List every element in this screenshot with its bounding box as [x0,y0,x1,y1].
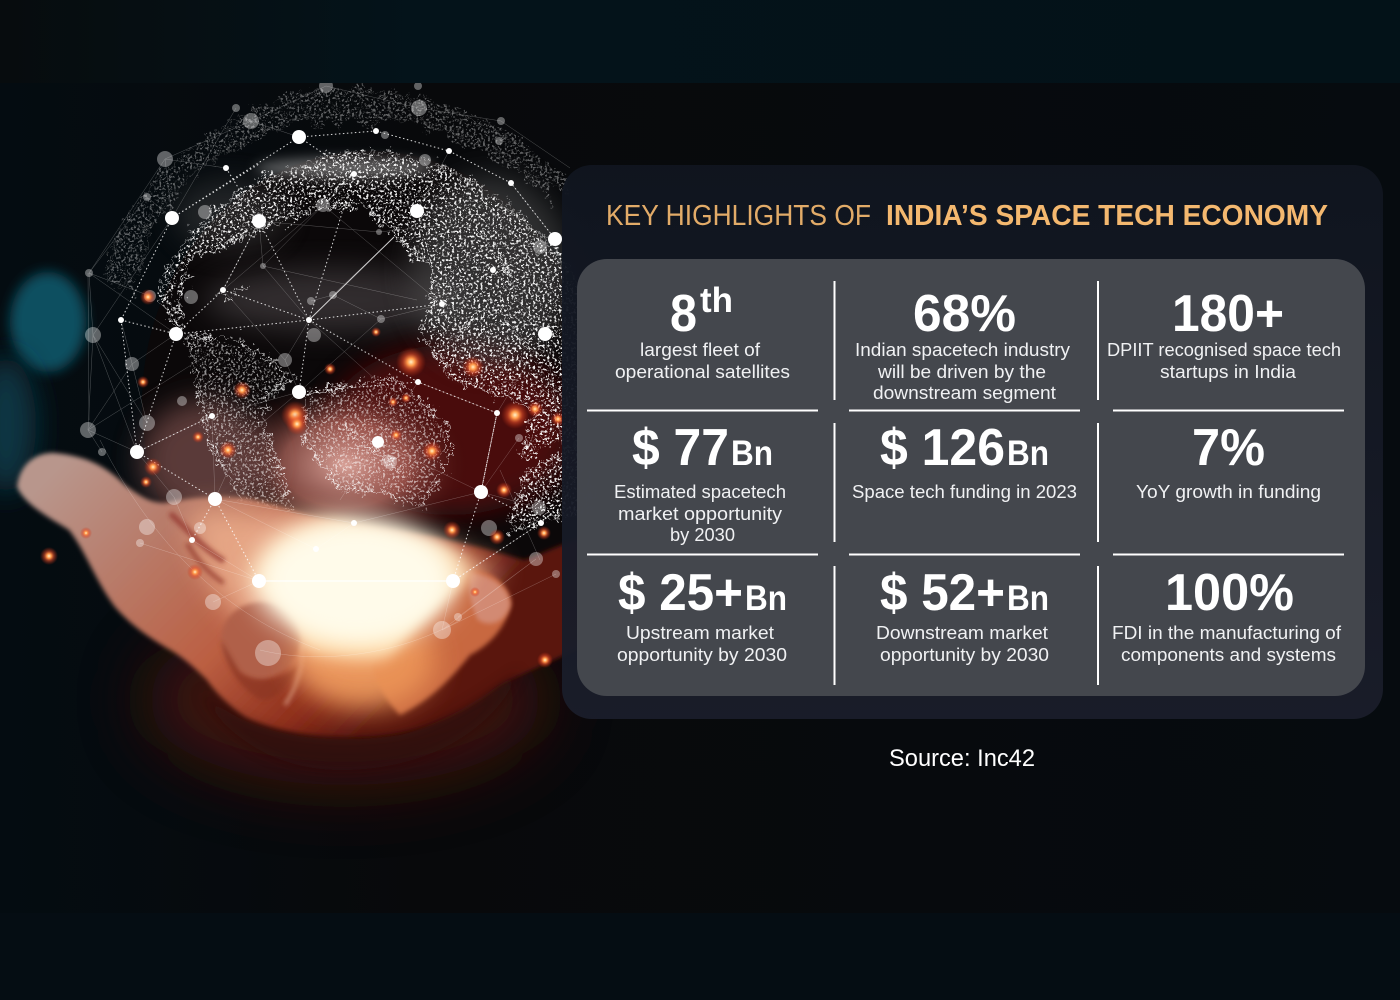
palm creases [172,515,222,582]
stat: $126Bn funding: Bn [1007,434,1049,473]
stat: $126Bn funding: $ 126 [880,419,1005,477]
stat: $52+Bn downstream: Downstream market [876,622,1048,643]
stat: $77Bn market: $ 77 [632,419,729,477]
globe sphere [124,150,562,532]
continent coastlines [161,153,590,570]
right finger [372,570,511,715]
stat: 8th largest fleet [615,281,790,382]
speckled southern continents [184,328,452,511]
source note: Source: Inc42 [889,745,1035,772]
stat: $25+Bn upstream: opportunity by 2030 [617,644,787,665]
bright dotted mesh lines [121,131,555,581]
bright solid line across the palm [259,237,453,581]
stat: 100% FDI: 100% [1165,564,1294,622]
grid dividers [587,281,1344,685]
stat: 68% downstream: will be driven by the [877,361,1046,382]
stat: $25+Bn upstream: Bn [745,579,787,618]
stat: 7% growth [1136,419,1321,502]
stat: 68% downstream: downstream segment [873,382,1056,403]
stat: 180+ startups [1107,285,1341,382]
stat: $25+Bn upstream: Upstream market [626,622,774,643]
title: INDIA’S SPACE TECH ECONOMY [886,200,1328,232]
stat: 8th largest fleet: th [700,281,733,320]
faint back side continents [108,89,575,300]
stat: $77Bn market: Bn [731,434,773,473]
stat: $25+Bn upstream: $ 25+ [618,564,743,622]
peach palm light [190,509,500,690]
hero image: hand holding glowing network globe [14,83,577,741]
grey translucent nodes [80,79,600,666]
faint mesh lines [88,86,570,657]
panel: stats grid background [577,259,1365,696]
stat: $126Bn funding [852,419,1077,502]
stat: 8th largest fleet: operational satellites [615,361,790,382]
stat: $52+Bn downstream [876,564,1049,665]
lower hand fade [238,678,508,741]
back side coast outlines [110,92,565,290]
stat: 100% FDI: FDI in the manufacturing of [1112,622,1342,643]
stat: 7% growth: YoY growth in funding [1136,481,1321,502]
stat: $52+Bn downstream: Bn [1007,579,1049,618]
title: KEY HIGHLIGHTS OF [606,200,871,232]
stat: 68% downstream: 68% [913,285,1016,343]
stat: $77Bn market: Estimated spacetech [614,481,786,502]
stat: 8th largest fleet: 8 [670,285,697,343]
stat: 180+ startups: startups in India [1160,361,1297,382]
speckled northern continents [161,153,590,530]
stat: $126Bn funding: Space tech funding in 2023 [852,481,1077,502]
stat: $77Bn market: by 2030 [670,524,735,545]
stat: 100% FDI [1112,564,1342,665]
red halo under the hand [145,615,545,785]
stat: 180+ startups: DPIIT recognised space tech [1107,339,1341,360]
left thumb pad [221,602,301,680]
stat: 68% downstream [855,285,1071,403]
hand [14,449,562,741]
stat: $52+Bn downstream: opportunity by 2030 [880,644,1049,665]
panel: highlights card [562,165,1383,719]
stat: $77Bn market: market opportunity [618,503,783,524]
stat: 68% downstream: Indian spacetech industry [855,339,1071,360]
title [606,200,1328,232]
stat: 180+ startups: 180+ [1172,285,1284,343]
white network nodes [118,128,562,588]
stat: 8th largest fleet: largest fleet of [640,339,761,360]
central palm glow [295,610,435,710]
stat: $77Bn market [614,419,786,545]
stat: 7% growth: 7% [1192,419,1265,477]
stat: $25+Bn upstream [617,564,787,665]
orange sparks [40,289,565,668]
stat: $52+Bn downstream: $ 52+ [880,564,1005,622]
stat: 100% FDI: components and systems [1121,644,1336,665]
